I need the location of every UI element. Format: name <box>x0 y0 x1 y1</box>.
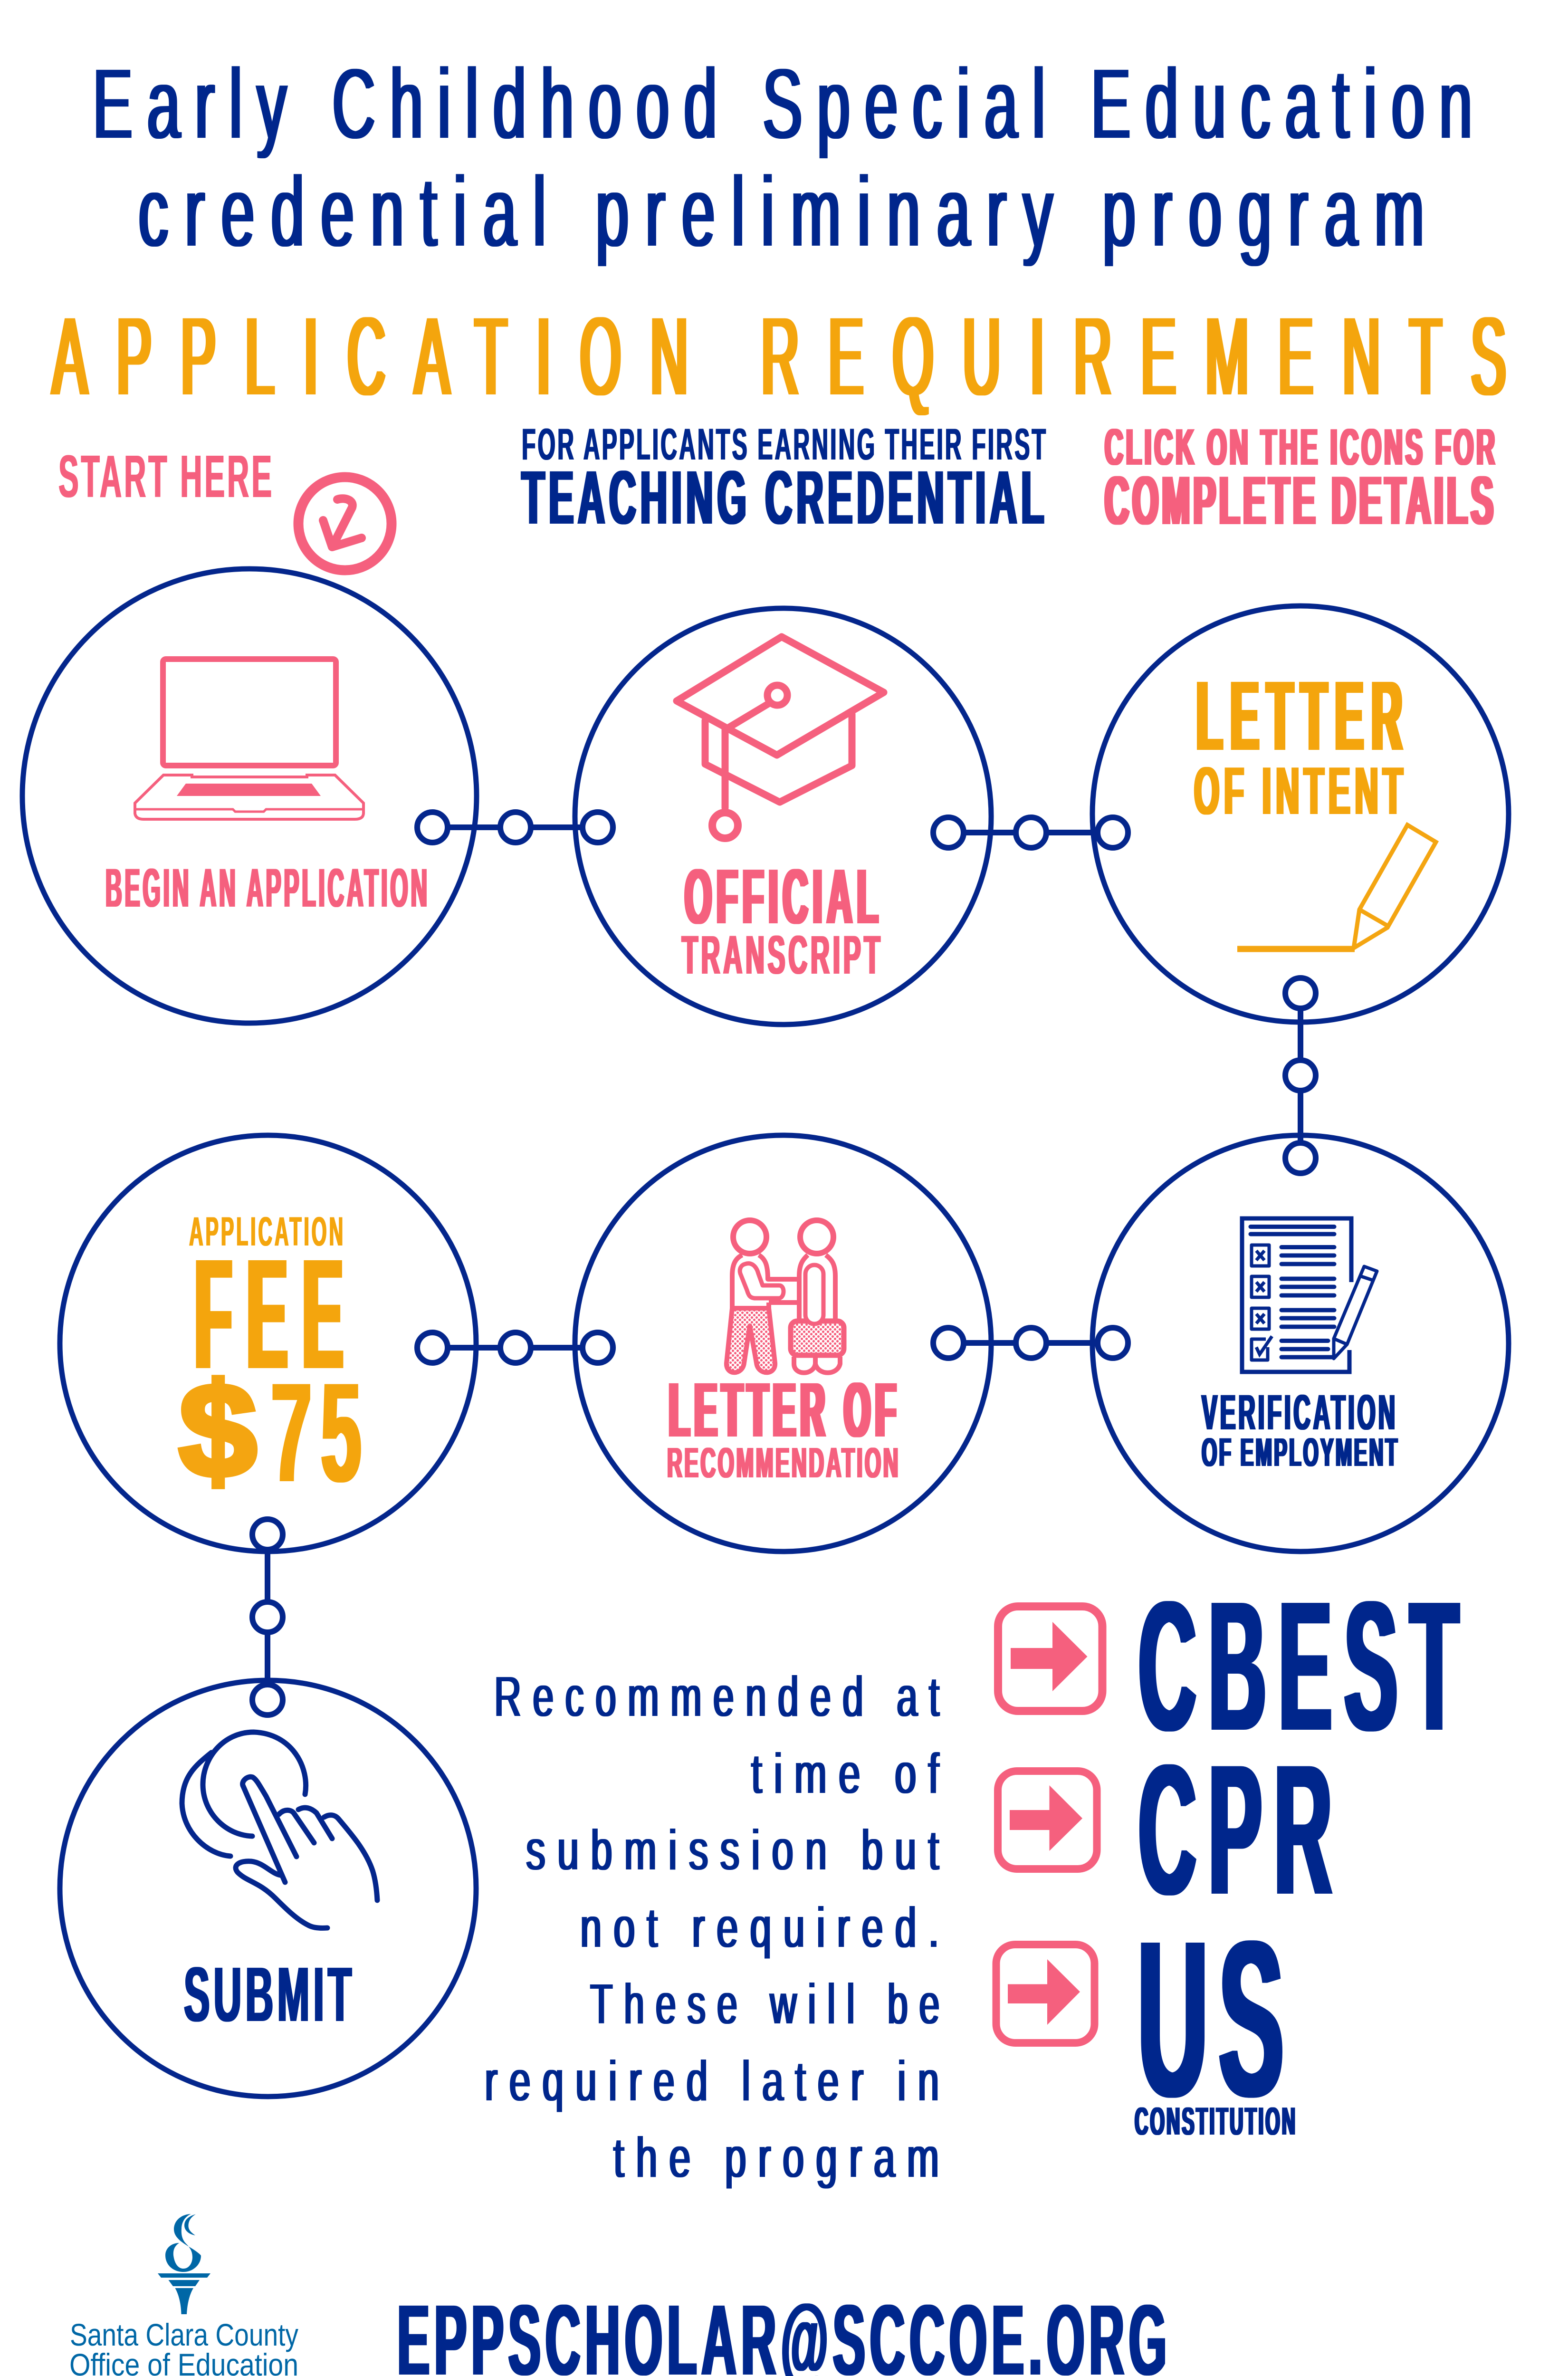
icon: graduation cap <box>677 637 884 838</box>
panel: letter of recommendation <box>575 1135 991 1552</box>
icon: pen signing <box>1237 825 1436 949</box>
logo: santa clara county office of education: Santa Clara County <box>70 2317 298 2352</box>
subheading: first teaching credential: TEACHING CREDENTIAL <box>522 455 1048 540</box>
label: letter of intent <box>1194 661 1410 829</box>
start here label: START HERE <box>58 443 274 510</box>
connector: fee to submit <box>252 1519 283 1715</box>
title <box>93 49 1487 267</box>
text: US <box>1138 1895 1294 2143</box>
text block: recommended at time of submission: the program <box>613 2126 951 2189</box>
icon: arrow box cbest <box>998 1606 1102 1711</box>
panel: submit <box>60 1680 476 2097</box>
text: CONSTITUTION <box>1135 2099 1297 2143</box>
logo: santa clara county office of education <box>69 2214 298 2376</box>
label: application fee 75 dollars: 75 <box>271 1353 371 1511</box>
text block: recommended at time of submission: time of <box>751 1742 951 1805</box>
icon: start arrow badge <box>298 477 392 570</box>
text block: recommended at time of submission: Recommended at <box>494 1665 951 1728</box>
text: BEGIN AN APPLICATION <box>105 858 430 919</box>
label: official transcript <box>682 853 883 986</box>
label: verification of employment <box>1202 1385 1399 1475</box>
panel: letter of intent <box>1092 606 1509 1022</box>
connector: intent to verification <box>1285 978 1316 1173</box>
label: letter of recommendation <box>667 1366 901 1487</box>
icon: arrow box cpr <box>998 1771 1097 1869</box>
panel: verification of employment <box>1092 1135 1509 1552</box>
panel: official transcript: TRANSCRIPT <box>682 925 883 986</box>
connector: recommendation to fee <box>417 1332 613 1363</box>
icon: arrow box us constitution <box>996 1945 1095 2043</box>
subheading: click on the icons <box>1105 418 1498 539</box>
icon: two people shaking hands <box>727 1220 844 1373</box>
text block: recommended at time of submission: submission but <box>526 1819 951 1882</box>
icon: laptop <box>135 659 363 819</box>
text block: recommended at time of submission: These will be <box>590 1973 951 2036</box>
requirement: us constitution <box>1135 1895 1297 2143</box>
text block: recommended at time of submission: required later in <box>485 2050 951 2113</box>
label: application fee 75 dollars: APPLICATION <box>189 1209 345 1255</box>
icon: hand tapping <box>182 1732 377 1928</box>
label: submit: SUBMIT <box>184 1951 355 2038</box>
panel: official transcript: OFFICIAL <box>685 853 883 940</box>
text block: recommended at time of submission <box>485 1665 951 2189</box>
text block: recommended at time of submission: not required. <box>580 1896 951 1959</box>
connector: transcript to intent <box>933 817 1128 848</box>
connector: begin to transcript <box>417 812 613 843</box>
panel: letter of recommendation: LETTER OF <box>669 1366 901 1453</box>
panel: letter of recommendation: RECOMMENDATION <box>667 1439 900 1487</box>
panel: application fee: FEE <box>195 1226 358 1401</box>
panel: begin an application <box>22 569 477 1023</box>
connector: verification to recommendation <box>933 1328 1128 1358</box>
label: application fee 75 dollars <box>179 1209 371 1511</box>
subheading: first teaching credential: FOR APPLICANTS EARNING THEIR FIRST <box>522 419 1048 469</box>
icon: checklist and pencil <box>1242 1218 1377 1372</box>
panel: official transcript <box>575 608 991 1025</box>
label: application fee 75 dollars: $ <box>179 1357 257 1505</box>
panel: application fee <box>60 1135 476 1552</box>
subheading: first teaching credential <box>522 419 1048 540</box>
